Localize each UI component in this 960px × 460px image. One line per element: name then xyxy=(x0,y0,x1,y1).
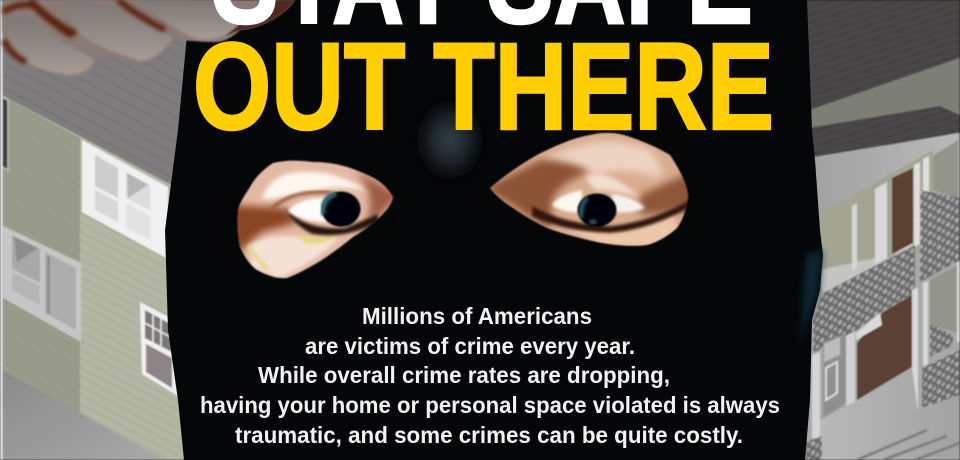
finger 3 xyxy=(140,0,240,40)
door lintel xyxy=(856,313,882,340)
left eye crease xyxy=(270,192,330,210)
small window at far left xyxy=(2,97,8,170)
right eye right brown xyxy=(640,170,695,215)
title line 2: OUT THERE xyxy=(193,19,774,156)
lattice under porch xyxy=(804,436,822,460)
right panel lower storey xyxy=(930,265,958,333)
finger 2 xyxy=(62,0,172,61)
left pupil xyxy=(321,191,361,227)
upper bay wall xyxy=(800,150,933,310)
white ledge under bay xyxy=(820,240,913,295)
right eye lower pale skin xyxy=(565,214,680,248)
lower door xyxy=(857,295,912,400)
left eyelid shadow xyxy=(284,208,378,236)
right balcony panel xyxy=(933,140,958,198)
large window lower xyxy=(3,226,81,342)
intro paragraph: traumatic, and some crimes can be quite costly. xyxy=(235,422,743,448)
left eye rim tone xyxy=(354,171,394,232)
upper columns xyxy=(852,156,929,271)
wall shadow xyxy=(2,95,80,414)
left page edge xyxy=(0,0,2,460)
right eye highlight above pupil xyxy=(585,174,640,197)
left eye brown band xyxy=(232,205,300,258)
background: right house xyxy=(780,0,960,460)
lower roof xyxy=(790,106,960,161)
porch steps xyxy=(857,430,960,460)
title xyxy=(193,0,774,156)
thumb shadow near title xyxy=(225,0,295,36)
roof right xyxy=(790,0,960,117)
lattice upper right xyxy=(920,190,960,282)
intro paragraph xyxy=(200,303,780,448)
entry door xyxy=(823,333,846,418)
small window lower xyxy=(140,302,178,396)
right eyelid shadow xyxy=(532,200,690,233)
lattice right lower xyxy=(922,350,960,408)
fist xyxy=(2,0,295,78)
intro paragraph: having your home or personal space violated is always xyxy=(200,392,780,418)
left eye upper pale skin xyxy=(262,172,375,200)
roof left xyxy=(0,0,200,198)
left eyelid yellow xyxy=(297,234,340,244)
right pupil xyxy=(577,193,617,227)
finger 1 xyxy=(6,16,94,74)
lattice middle xyxy=(813,245,915,353)
right eye white xyxy=(552,190,582,212)
intro paragraph: are victims of crime every year. xyxy=(305,333,635,359)
large window upper xyxy=(82,140,168,259)
right eye upper pale skin xyxy=(545,142,661,178)
intro paragraph: While overall crime rates are dropping, xyxy=(258,362,670,388)
left iris xyxy=(322,193,336,215)
lower columns xyxy=(812,262,960,442)
right eye brown band xyxy=(485,160,590,230)
background: left house xyxy=(0,0,200,460)
left eye white xyxy=(287,198,330,222)
porch base xyxy=(820,368,960,460)
ski mask xyxy=(165,0,823,460)
sidewalk xyxy=(2,370,165,460)
left eye lower pale skin xyxy=(250,236,340,278)
finger folds brown xyxy=(3,0,165,62)
house wall left xyxy=(2,95,200,460)
intro paragraph: Millions of Americans xyxy=(362,303,592,329)
right iris xyxy=(581,198,596,222)
left eye xyxy=(236,160,394,280)
mask nose highlight xyxy=(410,92,490,188)
right eye xyxy=(489,132,689,247)
gable xyxy=(790,133,958,240)
upper door xyxy=(892,168,913,254)
roof band xyxy=(790,58,960,131)
mask teal sheen xyxy=(800,250,822,345)
lattice right small xyxy=(930,323,953,357)
